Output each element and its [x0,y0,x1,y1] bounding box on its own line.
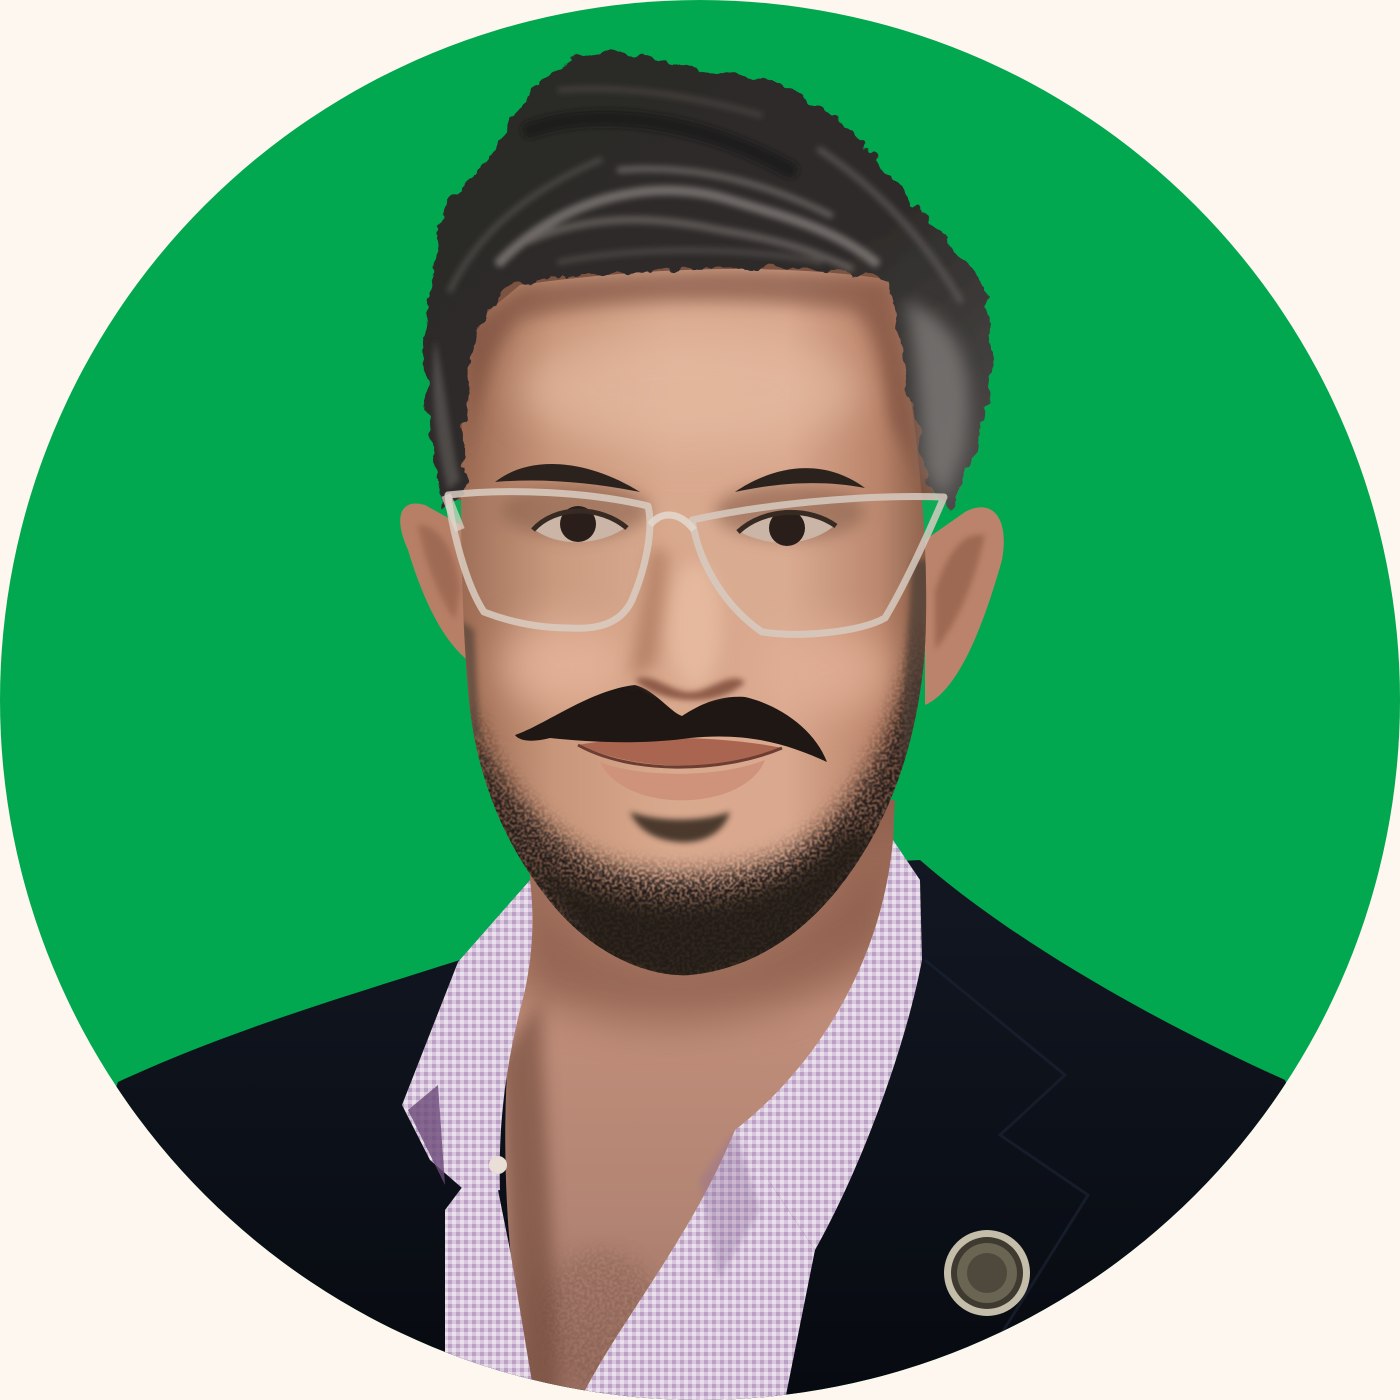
left collar [402,880,532,1195]
bridge [650,515,694,530]
collar shadow on chest [500,1000,560,1400]
face shading [460,269,940,1000]
upper lip [578,738,782,766]
soul patch [630,812,730,842]
hair [425,50,993,510]
forehead highlight [520,330,860,450]
shadow under chin [520,850,890,1024]
eye socket shadow right [715,484,865,540]
face [461,269,926,975]
glasses [446,492,944,634]
nose underside shadow [635,677,745,700]
right lens frame [692,497,944,634]
gray streak third [620,169,830,215]
gray temple left [433,340,460,490]
right eyebrow [735,468,865,492]
chest stubble [543,1246,650,1388]
right collar [735,840,922,1250]
shirt right side [580,840,922,1400]
strand left [450,160,600,290]
hair mass [425,50,993,510]
left collar button [489,1156,507,1174]
left lens corner [446,495,460,530]
chin beard [530,830,880,990]
right eye [738,510,836,546]
nose side shadow [630,550,668,680]
right cheek [760,625,890,715]
inner left ear shadow [418,525,460,620]
left ear [400,503,470,662]
right shirt panel [580,1130,815,1400]
strand lower [560,250,820,262]
jacket lapel seam [924,959,1090,1332]
gray temple right [905,300,969,500]
skin underlay behind hairline [452,250,935,500]
nose [630,550,745,700]
cheek stubble [470,640,926,976]
right ear [925,507,1004,705]
left collar shadow [408,1085,445,1185]
hair strands [450,89,960,300]
lips [578,738,782,800]
chest shading [500,850,890,1400]
strand top [560,89,760,115]
left eye [533,506,627,542]
jacket [116,860,1286,1400]
left cheek [500,620,630,710]
dark swirl top [530,118,790,170]
eye socket shadow left [500,482,650,538]
left shirt panel [445,1188,532,1380]
inner right ear shadow [935,534,985,650]
mustache [515,685,827,762]
left eyebrow [495,464,640,492]
lapel pin [944,1230,1030,1316]
gray streak second [530,220,850,268]
lower lip [600,760,765,800]
gray streak main [500,190,875,262]
sideburn stubble right [900,557,926,762]
strand right [820,150,960,300]
neck and chest [505,800,895,1400]
shirt left side [402,880,535,1400]
hairline shadow [466,269,914,459]
left lens frame [448,492,650,628]
nose highlight [669,563,721,687]
mouth line [578,745,782,767]
sideburn stubble left [460,620,480,740]
cheek stubble tint [474,708,918,976]
placket shadow [700,1130,760,1280]
